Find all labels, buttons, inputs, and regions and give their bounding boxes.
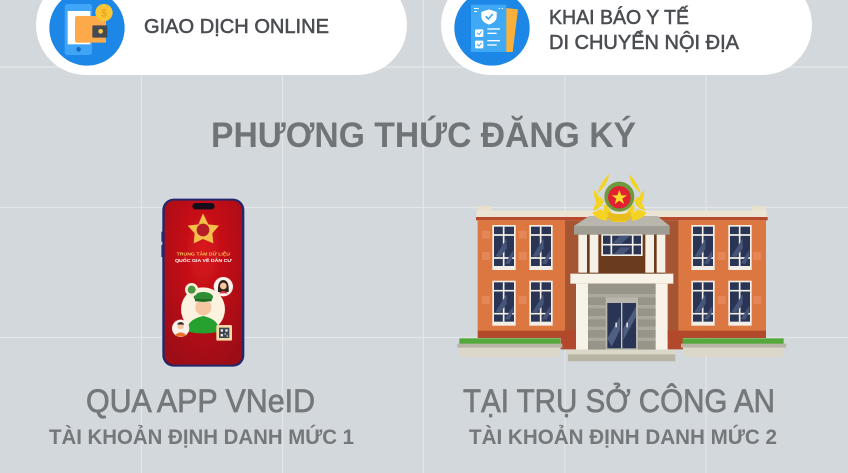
police emblem [592,174,647,222]
officer avatar [181,287,225,331]
method 1 title: QUA APP VNeID [86,383,315,419]
lawns and paths [459,338,560,344]
illustration: VNeID phone: TRUNG TÂM DỮ LIỆU [177,250,230,258]
brick walls [478,220,766,331]
panel: online transactions [36,0,407,75]
emblem star [188,213,219,243]
method 2 title: TẠI TRỤ SỞ CÔNG AN [463,383,775,419]
icon: phone wallet: $ [101,8,107,20]
windows [492,225,516,270]
illustration: VNeID phone [161,199,244,367]
roof parapet [478,206,492,213]
icon: medical form [454,0,530,66]
heading: PHƯƠNG THỨC ĐĂNG KÝ [211,115,636,155]
method 1 subtitle: TÀI KHOẢN ĐỊNH DANH MỨC 1 [49,425,354,449]
central portico [578,233,665,275]
label: health declaration: DI CHUYỂN NỘI ĐỊA [549,31,740,54]
icon: phone wallet [49,0,125,66]
illustration: VNeID phone: QUỐC GIA VỀ DÂN CƯ [175,257,233,264]
illustration: police headquarters [457,174,786,361]
label: online transactions: GIAO DỊCH ONLINE [144,16,329,38]
method 2 subtitle: TÀI KHOẢN ĐỊNH DANH MỨC 2 [469,425,777,449]
label: health declaration [549,6,740,54]
label: health declaration: KHAI BÁO Y TẾ [549,6,689,29]
panel: health declaration [441,0,812,75]
